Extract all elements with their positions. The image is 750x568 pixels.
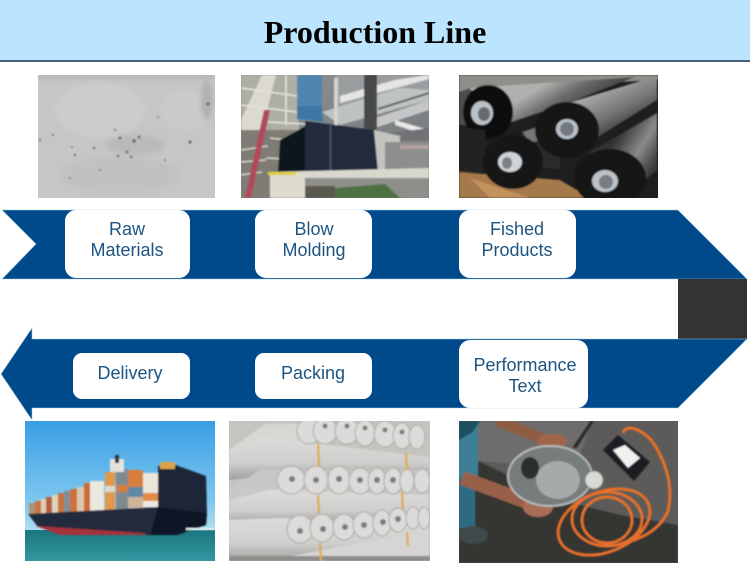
photo: packed white rolls <box>229 418 430 561</box>
photo: finished black rolls <box>459 75 658 207</box>
step: finished products: Products <box>481 240 553 260</box>
step: blow molding <box>255 210 372 278</box>
title: Production Line <box>264 14 486 50</box>
photo: raw material granules <box>38 75 215 198</box>
step: blow molding: Molding <box>282 240 346 260</box>
step: finished products <box>459 210 576 278</box>
step: blow molding: Blow <box>294 219 335 239</box>
step: performance test: Text <box>508 376 542 396</box>
photo: blow molding machine <box>241 75 429 200</box>
step: raw materials <box>65 210 190 278</box>
step: finished products: Fished <box>490 219 544 239</box>
step: performance test: Performance <box>473 355 577 375</box>
process arrow: lower band <box>1 328 747 420</box>
connector block <box>678 279 747 339</box>
process arrow: upper band <box>2 210 747 279</box>
step: raw materials: Materials <box>90 240 164 260</box>
photo: performance test <box>458 421 678 568</box>
step: packing: Packing <box>281 363 345 383</box>
step: raw materials: Raw <box>109 219 146 239</box>
header band <box>0 0 750 62</box>
step: performance test <box>459 340 588 408</box>
step: packing <box>255 353 372 399</box>
photo: container ship <box>25 421 215 561</box>
step: delivery: Delivery <box>97 363 163 383</box>
step: delivery <box>73 353 190 399</box>
